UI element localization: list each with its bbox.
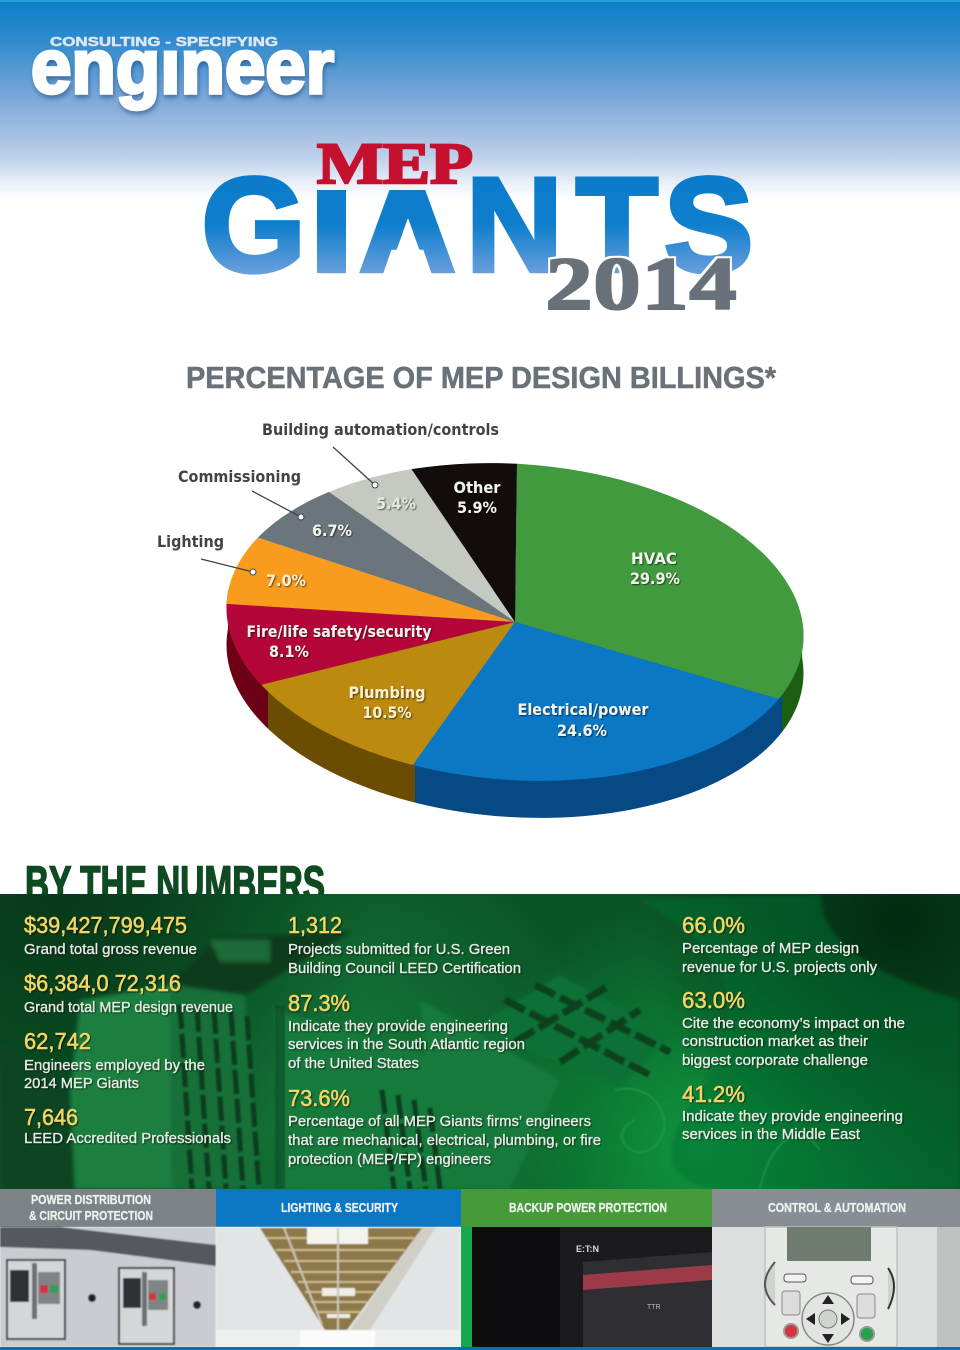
stat: engineers employed: 62,742: [24, 1028, 91, 1054]
stat: U.S. projects: 66.0%: [682, 912, 745, 938]
stat: MEP design revenue: [24, 970, 233, 1016]
stat: South Atlantic: of the United States: [288, 1055, 419, 1072]
header gradient background: [0, 0, 960, 200]
stat: Middle East: services in the Middle East: [682, 1126, 861, 1143]
panel: lighting and security tile: [216, 1189, 461, 1347]
stat: MEP/FP engineers: protection (MEP/FP) engineers: [288, 1151, 491, 1168]
callout: Lighting: [157, 532, 256, 575]
stat: LEED professionals: [24, 1104, 231, 1147]
title: MEP Giants 2014: MEP: [317, 131, 473, 196]
panel: power distribution tile: POWER DISTRIBUTION: [31, 1192, 151, 1207]
stat: engineers employed: [24, 1028, 205, 1092]
value labels: 24.6%: [557, 721, 607, 740]
stat: Middle East: 41.2%: [682, 1081, 745, 1107]
stat: LEED professionals: 7,646: [24, 1104, 78, 1130]
title: MEP Giants 2014: N: [466, 151, 563, 300]
slice: Plumbing: [261, 622, 515, 765]
value labels: 5.4%: [376, 494, 416, 513]
photo: UPS unit: TTR: [647, 1304, 661, 1311]
stat: LEED projects: Projects submitted for U.S. Green: [288, 941, 510, 958]
title: MEP Giants 2014: 2014: [545, 243, 737, 326]
value labels: Other: [454, 478, 501, 497]
column: statistics middle: [288, 912, 601, 1168]
stat: MEP/FP engineers: 73.6%: [288, 1085, 350, 1111]
value labels: Electrical/power: [518, 700, 649, 719]
panel: control and automation tile: [712, 1189, 960, 1347]
stat: South Atlantic: [288, 990, 525, 1072]
stat: MEP/FP engineers: [288, 1085, 601, 1168]
pie side wall: [220, 590, 812, 830]
pie top surface: [226, 463, 804, 781]
stat: gross revenue: Grand total gross revenue: [24, 941, 197, 958]
stat: South Atlantic: 87.3%: [288, 990, 350, 1016]
callout: Commissioning: [178, 467, 304, 520]
value labels: 5.9%: [457, 498, 497, 517]
stat: South Atlantic: services in the South Atlantic region: [288, 1036, 525, 1053]
slice: Fire/life safety/security: [226, 604, 515, 685]
stat: Middle East: [682, 1081, 903, 1143]
stat: gross revenue: $39,427,799,475: [24, 912, 187, 938]
stat: economy impact: construction market as their: [682, 1033, 868, 1050]
photo: drive keypad: [712, 1227, 960, 1347]
column: statistics right: [682, 912, 905, 1143]
title: MEP Giants 2014: G: [202, 151, 306, 300]
slice: Commissioning: [258, 492, 514, 622]
title: MEP Giants 2014: T: [576, 151, 658, 300]
slice: Lighting: [226, 538, 515, 622]
stat: LEED projects: Building Council LEED Certification: [288, 960, 521, 977]
stat: economy impact: [682, 987, 905, 1069]
value labels: Fire/life safety/security: [246, 622, 432, 641]
panel: control and automation tile: CONTROL & AUTOMATION: [768, 1200, 906, 1215]
stat: South Atlantic: Indicate they provide engineering: [288, 1018, 508, 1035]
value labels: Plumbing: [348, 683, 426, 702]
title: MEP Giants 2014: S: [664, 151, 753, 300]
stat: MEP design revenue: Grand total MEP design revenue: [24, 999, 233, 1016]
title: MEP Giants 2014: [204, 144, 750, 310]
value labels: 29.9%: [630, 569, 680, 588]
slice: Other: [411, 463, 517, 622]
photo: ceiling: [216, 1227, 461, 1347]
value labels: [246, 478, 680, 740]
stat: engineers employed: Engineers employed by the: [24, 1057, 205, 1074]
stat: engineers employed: 2014 MEP Giants: [24, 1075, 139, 1092]
title: MEP Giants 2014: I: [314, 151, 351, 300]
callout: Lighting: Lighting: [157, 532, 224, 551]
pie chart: MEP design billings: [158, 423, 804, 818]
stat: LEED projects: [288, 912, 521, 977]
value labels: 6.7%: [312, 521, 352, 540]
panel: backup power protection tile: [461, 1189, 712, 1347]
panel: power distribution tile: [0, 1189, 216, 1347]
stat: MEP/FP engineers: Percentage of all MEP Giants firms’ engineers: [288, 1113, 591, 1130]
stat: economy impact: Cite the economy’s impact on the: [682, 1015, 905, 1032]
stat: MEP/FP engineers: that are mechanical, electrical, plumbing, or fire: [288, 1132, 601, 1149]
value labels: 8.1%: [269, 642, 309, 661]
panel: power distribution tile: & CIRCUIT PROTECTION: [29, 1208, 153, 1223]
value labels: 10.5%: [362, 703, 412, 722]
bottom blue rule: [0, 1347, 960, 1350]
value labels: 7.0%: [266, 571, 306, 590]
panel: lighting and security tile: LIGHTING & SECURITY: [281, 1200, 398, 1215]
title: MEP Giants 2014: A: [359, 151, 456, 300]
callout: Building automation/controls: [262, 420, 499, 488]
callout: Building automation/controls: Building automation/controls: [262, 420, 499, 439]
slice: HVAC: [515, 464, 804, 699]
stat: U.S. projects: Percentage of MEP design: [682, 940, 859, 957]
logo: Consulting-Specifying Engineer: engineer: [31, 24, 334, 110]
callout: Commissioning: Commissioning: [178, 467, 301, 486]
value labels: HVAC: [631, 549, 677, 568]
stat: Middle East: Indicate they provide engineering: [682, 1108, 903, 1125]
slice: Electrical/power: [413, 622, 778, 781]
column: statistics left: [24, 912, 233, 1147]
stat: economy impact: biggest corporate challenge: [682, 1052, 868, 1069]
stat: gross revenue: [24, 912, 197, 958]
photo: switchgear: [0, 1227, 216, 1347]
stat: LEED projects: 1,312: [288, 912, 342, 938]
panel: green statistics background: [0, 894, 960, 1190]
panel: backup power protection tile: BACKUP POWER PROTECTION: [509, 1200, 667, 1215]
photo: UPS unit: E:T:N: [576, 1244, 599, 1254]
photo: UPS unit: [461, 1227, 712, 1347]
stat: MEP design revenue: $6,384,0 72,316: [24, 970, 181, 996]
section heading: By the numbers: BY THE NUMBERS: [25, 856, 325, 912]
logo: Consulting-Specifying Engineer: CONSULTING - SPECIFYING: [50, 34, 278, 49]
stat: U.S. projects: [682, 912, 877, 976]
stat: economy impact: 63.0%: [682, 987, 745, 1013]
chart heading: PERCENTAGE OF MEP DESIGN BILLINGS*: [186, 360, 777, 395]
stat: LEED professionals: LEED Accredited Professionals: [24, 1130, 231, 1147]
slice: Building automation/controls: [329, 469, 515, 622]
stat: U.S. projects: revenue for U.S. projects only: [682, 959, 877, 976]
